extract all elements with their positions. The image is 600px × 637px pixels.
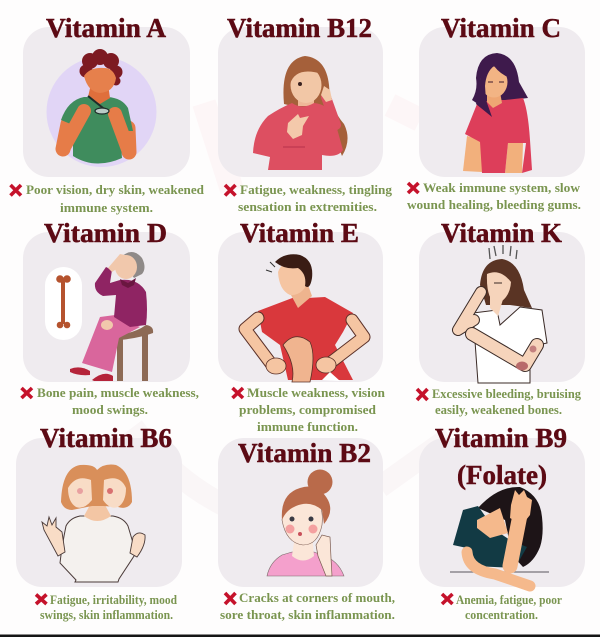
caption xyxy=(40,593,177,622)
caption: Poor vision, dry skin, weakened xyxy=(26,183,204,197)
heading: Vitamin B9 xyxy=(435,423,567,453)
panel: Vitamin B6 xyxy=(16,423,182,622)
heading: Vitamin B12 xyxy=(227,13,372,43)
heading: Vitamin B2 xyxy=(238,438,371,468)
card background xyxy=(23,27,190,177)
panel: Vitamin B2 xyxy=(218,438,395,622)
caption: swings, skin inflammation. xyxy=(40,608,173,622)
panel: Vitamin C xyxy=(407,13,585,212)
panel: Vitamin B12 xyxy=(218,13,393,214)
caption: problems, compromised xyxy=(239,403,376,417)
icon: red cross xyxy=(225,593,236,604)
caption xyxy=(37,386,199,417)
caption: Weak immune system, slow xyxy=(423,181,580,195)
icon: red cross xyxy=(232,388,243,398)
illustration: woman with bruised arm xyxy=(458,245,547,383)
heading: Vitamin A xyxy=(46,13,166,43)
panel: Vitamin K xyxy=(417,218,585,417)
caption: Cracks at corners of mouth, xyxy=(239,591,395,605)
illustration: woman with rosy cheeks xyxy=(267,470,344,576)
caption xyxy=(239,386,385,434)
heading: Vitamin E xyxy=(240,218,359,248)
caption: Fatigue, irritability, mood xyxy=(50,593,177,607)
heading: Vitamin B6 xyxy=(40,423,172,453)
card background xyxy=(419,232,585,382)
illustration: two-faced woman with mood swings xyxy=(42,465,145,582)
illustration: exhausted woman at table xyxy=(450,487,549,586)
card background xyxy=(218,438,383,587)
panel: Vitamin E xyxy=(218,218,385,434)
caption xyxy=(432,387,582,417)
illustration: man with sore knee xyxy=(245,254,364,382)
heading: Vitamin C xyxy=(441,13,561,43)
card background xyxy=(218,27,383,177)
caption: mood swings. xyxy=(72,403,148,417)
card background xyxy=(16,438,182,587)
caption xyxy=(238,183,393,214)
caption xyxy=(407,181,581,212)
card background xyxy=(23,232,190,382)
caption: concentration. xyxy=(465,608,538,622)
caption xyxy=(456,593,562,622)
heading: (Folate) xyxy=(457,460,547,490)
card background xyxy=(419,438,585,587)
heading xyxy=(435,423,567,490)
caption: Muscle weakness, vision xyxy=(247,386,385,400)
caption xyxy=(26,183,204,215)
illustration: elderly woman and bone xyxy=(45,252,153,381)
caption: sensation in extremities. xyxy=(238,200,377,214)
caption: Excessive bleeding, bruising xyxy=(432,387,582,401)
icon: red cross xyxy=(225,185,236,196)
icon: red cross xyxy=(442,594,452,604)
heading: Vitamin D xyxy=(44,218,167,248)
panel: Vitamin D xyxy=(22,218,199,417)
caption: Bone pain, muscle weakness, xyxy=(37,386,199,400)
icon: red cross xyxy=(10,185,21,196)
caption: immune function. xyxy=(257,420,358,434)
caption: Fatigue, weakness, tingling xyxy=(240,183,393,197)
panel: Vitamin B9 (Folate) xyxy=(419,423,585,622)
illustration: tired woman in red shirt xyxy=(463,53,532,173)
caption: easily, weakened bones. xyxy=(435,403,562,417)
caption xyxy=(220,591,395,622)
caption: sore throat, skin inflammation. xyxy=(220,608,395,622)
heading: Vitamin K xyxy=(441,218,562,248)
icon: red cross xyxy=(22,388,32,398)
panel: Vitamin A xyxy=(10,13,204,215)
illustration: man holding glasses xyxy=(46,49,156,167)
caption: Anemia, fatigue, poor xyxy=(456,593,562,607)
card background xyxy=(419,27,585,177)
caption: wound healing, bleeding gums. xyxy=(407,198,581,212)
icon: red cross xyxy=(36,594,46,604)
card background xyxy=(218,232,383,382)
caption: immune system. xyxy=(60,201,153,215)
illustration: tired woman touching chest xyxy=(253,56,348,170)
icon: red cross xyxy=(417,389,428,400)
icon: red cross xyxy=(408,183,418,193)
